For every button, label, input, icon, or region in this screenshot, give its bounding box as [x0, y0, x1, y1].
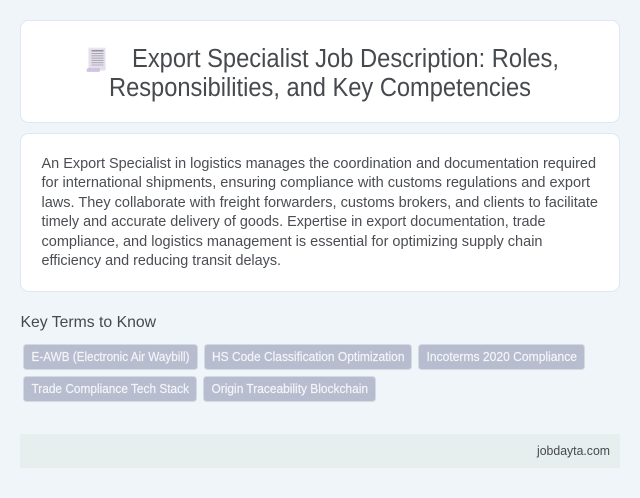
text block: description: timely and accurate delivery of goods. Expertise in export documentation, trade	[42, 214, 546, 230]
tag: Incoterms	[418, 344, 584, 370]
tag: HS code	[204, 344, 412, 370]
heading: key terms: Key Terms to Know	[20, 314, 156, 331]
icon: scroll document	[86, 48, 106, 72]
text block: description: efficiency and reducing transit delays.	[42, 253, 281, 269]
tag: HS code: HS Code Classification Optimization	[212, 350, 405, 364]
panel: description card	[20, 134, 620, 292]
footer bar: jobdayta.com	[536, 444, 610, 458]
text block: description: laws. They collaborate with freight forwarders, customs brokers, and clients to facilitate	[42, 195, 598, 211]
tag: trade compliance	[24, 376, 196, 402]
tag: E-AWB: E-AWB (Electronic Air Waybill)	[32, 350, 190, 364]
tag: Incoterms: Incoterms 2020 Compliance	[426, 350, 577, 364]
title	[109, 45, 559, 102]
tag: trade compliance: Trade Compliance Tech Stack	[32, 382, 190, 396]
text block: description	[42, 156, 598, 269]
footer bar	[20, 434, 620, 468]
tag: origin traceability: Origin Traceability Blockchain	[212, 382, 368, 396]
title: Responsibilities, and Key Competencies	[109, 74, 531, 102]
panel: title card	[20, 20, 620, 122]
tag: E-AWB	[24, 344, 198, 370]
tag: origin traceability	[204, 376, 376, 402]
text block: description: compliance, and logistics management is essential for optimizing supply chain	[42, 234, 542, 250]
title: Export Specialist Job Description: Roles,	[132, 45, 559, 73]
text block: description: for international shipments, ensuring compliance with customs regulations and export	[42, 175, 590, 191]
text block: description: An Export Specialist in logistics manages the coordination and documentation required	[42, 156, 596, 172]
